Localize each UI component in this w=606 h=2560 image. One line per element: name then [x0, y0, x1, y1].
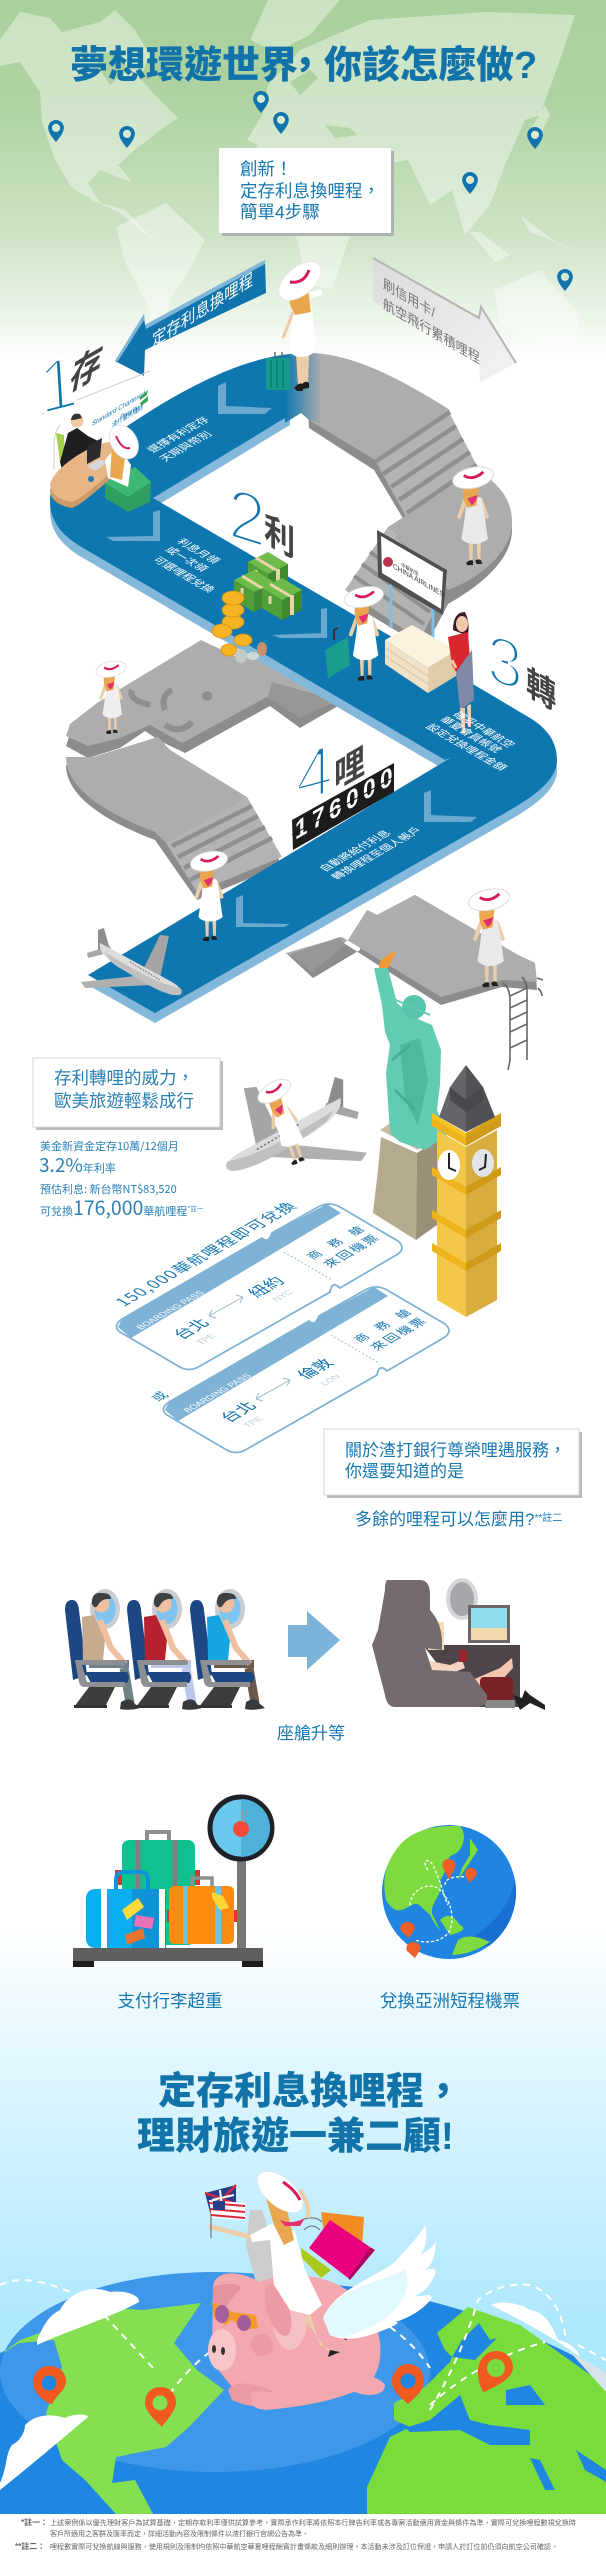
map pins — [48, 91, 573, 291]
step 2 number and heading — [228, 472, 295, 566]
footnotes: *註一： — [21, 2517, 48, 2527]
step 3: China Airlines counter: 中華航空 — [401, 561, 418, 578]
arrow: upgrade — [288, 1611, 340, 1670]
callout: power of miles — [33, 1058, 223, 1130]
airplane with woman — [226, 1073, 367, 1171]
footnotes — [15, 2517, 576, 2551]
boarding pass: New York: BOARDING PASS — [134, 1289, 207, 1331]
flip board 176000: 6 — [329, 790, 342, 827]
boarding pass: New York: 150,000華航哩程即可兌換 — [108, 1197, 302, 1310]
counter agent — [448, 612, 474, 733]
callout: power of miles: 存利轉哩的威力， — [54, 1068, 194, 1088]
label: cabin upgrade: 座艙升等 — [277, 1724, 345, 1743]
arrow: credit card miles: 航空飛行累積哩程 — [383, 295, 480, 367]
bottom globe — [0, 2272, 606, 2514]
boarding pass: London: TPE — [241, 1415, 265, 1429]
clouds — [0, 2289, 580, 2490]
step 3 number and heading: 轉 — [526, 662, 556, 719]
footnotes: 上述案例係以優先理財客戶為試算基礎，定期存款利率僅供試算參考，實際承作利率將依照本行牌告利率或各專案活動適用資金與條件為準，實際可兌換哩程數視兌換時 — [50, 2518, 576, 2527]
gray platforms: lower left with stairs — [66, 640, 338, 900]
step 2 road text: 可選哩程兌換 — [149, 555, 218, 594]
step 1 road text: 天期與幣別 — [156, 430, 215, 464]
step 2 road text — [149, 536, 224, 594]
step 1 road text: 選擇有利定存 — [143, 415, 213, 455]
flip board 176000: 0 — [380, 760, 393, 797]
airplane on road — [81, 928, 182, 995]
title: 夢想環遊世界，你該怎麼做? — [70, 45, 537, 87]
boarding pass: New York: 台北 — [169, 1316, 214, 1342]
woman with green suitcase at start — [266, 254, 328, 391]
step 4 road text: 自動將給付利息 — [315, 828, 394, 874]
callout: priority miles service: 你還要知道的是 — [345, 1462, 464, 1481]
step 3: China Airlines counter: CHINA AIRLINES — [393, 561, 444, 599]
step 2 road text: 或一次領 — [161, 544, 212, 573]
road: road edge thickness — [50, 364, 557, 1023]
world map — [0, 0, 580, 350]
callout: four steps — [219, 148, 394, 236]
money pile — [212, 552, 302, 663]
boarding pass: London — [163, 1287, 449, 1452]
step 1: banker at desk scene — [50, 414, 151, 512]
step 4 number and heading: 4 — [296, 729, 333, 817]
question: extra miles: 多餘的哩程可以怎麼用? — [355, 1510, 534, 1529]
flip board 176000: 7 — [312, 799, 325, 836]
arrow: time deposit interest to miles — [115, 260, 266, 376]
step 3: China Airlines counter — [377, 530, 456, 693]
step 4 road text: 轉換哩程至個人帳戶 — [327, 825, 425, 882]
step 1: bank card and logo: Standard Chartered — [92, 390, 146, 428]
callout: four steps: 簡單4步驟 — [240, 202, 320, 222]
boarding pass: London: 來回機票 — [367, 1315, 432, 1353]
road fade into gray — [285, 353, 322, 424]
boarding pass: New York: 商務艙 — [303, 1218, 378, 1262]
road: serpentine blue route — [50, 354, 557, 1013]
baggage scale with suitcases — [73, 1797, 272, 1967]
footnotes: 哩程數實際可兌換航線與服務，使用規則及限制均依照中華航空華夏哩程酬賓計畫條款及細則辦理。本活動未涉及訂位保證，申請人於訂位前仍須向航空公司確認。 — [50, 2542, 558, 2551]
callout: four steps: 定存利息換哩程， — [240, 181, 380, 201]
footnotes: **註二： — [15, 2541, 45, 2551]
dashed flight paths — [0, 2280, 606, 2410]
chevrons on road — [106, 382, 477, 927]
boarding pass: London: BOARDING PASS — [181, 1372, 254, 1414]
destination pins — [33, 2351, 513, 2427]
callout: power of miles: 歐美旅遊輕鬆成行 — [54, 1091, 194, 1111]
step 1 number and heading: 存 — [68, 338, 104, 400]
or label: 或 — [148, 1389, 172, 1404]
callout: priority miles service — [324, 1429, 582, 1498]
example figures: 3.2%年利率 — [39, 1151, 116, 1178]
woman with teal suitcase — [325, 583, 385, 681]
step 3 road text: 設定兌換哩程金額 — [422, 721, 511, 772]
step 1: bank card and logo: 渣打優先理財 — [112, 403, 143, 429]
woman walking on road — [189, 848, 229, 941]
step 2 road text: 利息月領 — [173, 536, 224, 565]
woman riding flying pig — [205, 2164, 436, 2410]
flip board 176000: 0 — [363, 770, 376, 807]
step 1 number and heading: 1 — [28, 342, 87, 429]
boarding pass: London: 商務艙 — [350, 1301, 425, 1345]
ladder — [503, 977, 543, 1070]
woman on lower-left platform — [94, 659, 128, 734]
closing title — [137, 2071, 462, 2158]
woman on upper landing — [451, 463, 495, 565]
footnotes: 客戶所適用之客群及匯率而定，詳細活動內容及限制條件以渣打銀行官網公告為準。 — [50, 2529, 309, 2538]
step 1: bank card and logo — [42, 371, 170, 470]
example figures: 可兌換176,000華航哩程 — [40, 1192, 187, 1221]
arrow: credit card miles: 刷信用卡/ — [383, 275, 435, 321]
label: overweight baggage: 支付行李超重 — [118, 1991, 222, 2011]
boarding pass: New York: 來回機票 — [320, 1232, 385, 1270]
flip board 176000: 0 — [346, 780, 359, 817]
statue of liberty — [373, 952, 447, 1240]
step 3 road text: 華夏會員帳號 — [436, 714, 506, 754]
gray platform: lower right with ladder — [286, 895, 537, 1005]
flip board 176000 — [292, 760, 394, 850]
boarding pass: New York — [108, 1197, 402, 1370]
step 1: bank card and logo: Priority — [120, 404, 139, 422]
step 4 number and heading: 哩 — [334, 739, 365, 798]
closing title: 理財旅遊一兼二顧! — [137, 2116, 454, 2158]
step 3 number and heading — [487, 620, 556, 719]
boarding pass: London: 台北 — [216, 1399, 261, 1425]
boarding pass: New York: TPE — [194, 1332, 218, 1346]
example figures: 預估利息: 新台幣NT$83,520 — [40, 1181, 177, 1197]
callout: priority miles service: 關於渣打銀行尊榮哩遇服務， — [345, 1441, 566, 1460]
callout: four steps: 創新！ — [240, 159, 292, 179]
asia globe — [382, 1825, 516, 1959]
step 2 number and heading: 利 — [264, 507, 295, 566]
step 2 number and heading: 2 — [228, 472, 266, 564]
boarding pass: New York: NYC — [270, 1288, 296, 1303]
step 3 road text: 確妥中華航空 — [449, 709, 519, 749]
boarding pass: New York: 紐約 — [244, 1274, 289, 1300]
arrow: time deposit interest to miles: 定存利息換哩程 — [152, 269, 253, 351]
economy seats — [65, 1589, 265, 1710]
step 4 number and heading — [296, 729, 365, 817]
gray platforms: upper staircase and landing — [305, 353, 512, 648]
arrow: credit card miles — [373, 258, 516, 382]
step 3 number and heading: 3 — [487, 620, 523, 706]
flip board 176000: 1 — [295, 809, 308, 846]
label: asia short haul: 兌換亞洲短程機票 — [380, 1991, 520, 2011]
woman on lower-right platform — [467, 885, 511, 987]
example figures — [39, 1138, 204, 1221]
closing title: 定存利息換哩程， — [158, 2071, 462, 2113]
big ben clock tower — [432, 1065, 501, 1317]
example figures: *註一 — [187, 1203, 204, 1213]
boarding pass: London: 倫敦 — [293, 1356, 338, 1382]
question: extra miles: **註二 — [534, 1512, 562, 1524]
boarding pass: London: LON — [318, 1373, 343, 1387]
example figures: 美金新資金定存10萬/12個月 — [40, 1138, 179, 1154]
business class seat — [372, 1578, 545, 1710]
